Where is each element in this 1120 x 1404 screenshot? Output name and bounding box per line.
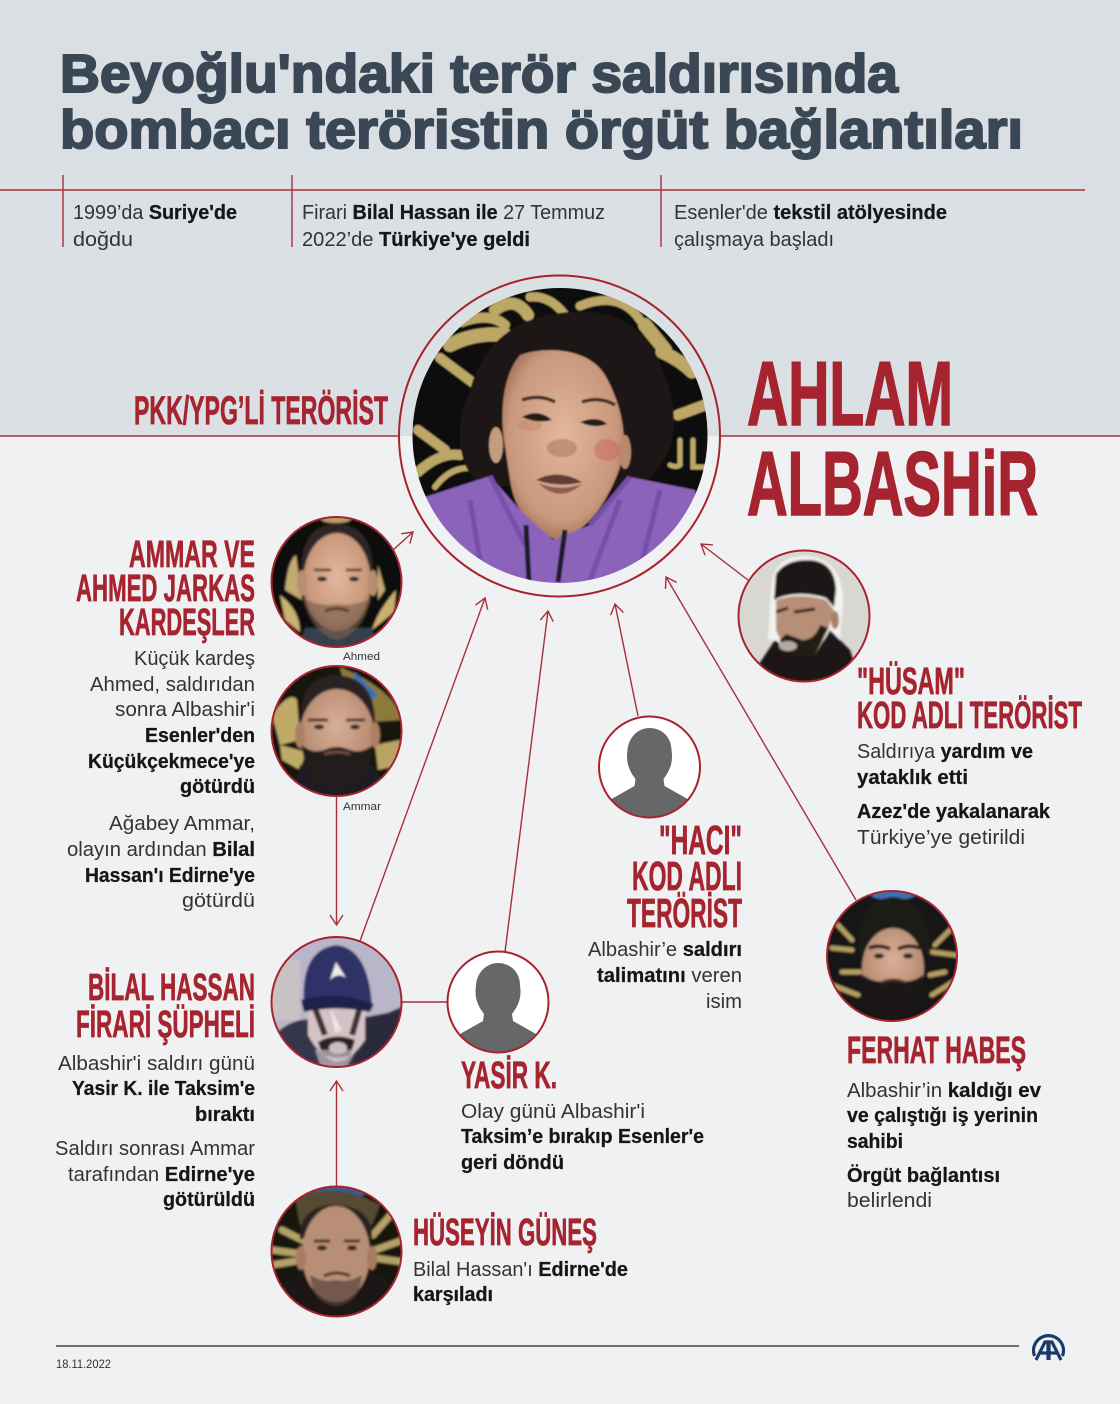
- text: Ahmed: Küçükçekmece'ye: [88, 751, 255, 773]
- heading: "Hüsam" kod adlı terörist: "HÜSAM": [857, 660, 965, 703]
- fact: arrival: Firari Bilal Hassan ile 27 Temmuz: [302, 202, 605, 224]
- text: Ammar: Ağabey Ammar,: [109, 813, 255, 835]
- heading: Bilal Hassan firari şüpheli: BİLAL HASSAN: [88, 967, 255, 1009]
- fact: birth: [73, 202, 237, 251]
- arrow: Ahmed to Albashir: [393, 532, 413, 550]
- heading: Ammar ve Ahmed Jarkas kardeşler: AMMAR VE: [129, 534, 255, 576]
- arrow: Bilal Hassan to Albashir: [360, 598, 485, 941]
- caption: Ammar: Ammar: [343, 801, 381, 813]
- arrow: Ferhat Habeş to Albashir: [666, 577, 856, 900]
- text: Hacı details: Albashir’e saldırı: [588, 939, 742, 961]
- text: Hüsam details: yataklık etti: [857, 767, 968, 789]
- label: PKK/YPG'li terörist: PKK/YPG’Lİ TERÖRİST: [134, 388, 388, 433]
- text: Ahmed: sonra Albashir'i: [115, 699, 255, 721]
- heading: "Hacı" kod adlı terörist: [627, 817, 742, 936]
- text: Bilal Hassan details: tarafından Edirne'ye: [68, 1164, 255, 1186]
- icon: AA logo: [1034, 1336, 1063, 1360]
- date: 18.11.2022: [56, 1357, 111, 1371]
- text: Bilal Hassan details: bıraktı: [195, 1104, 255, 1126]
- text: Bilal Hassan details: Yasir K. ile Taksim'e: [72, 1078, 255, 1100]
- heading: "Hacı" kod adlı terörist: TERÖRİST: [627, 890, 742, 936]
- panel: Hacı: [588, 817, 742, 1013]
- fact: birth: doğdu: [73, 229, 133, 251]
- text: Yasir K. details: Taksim’e bırakıp Esenler'e: [461, 1126, 704, 1148]
- fact: arrival: 2022’de Türkiye'ye geldi: [302, 229, 530, 251]
- text: Hüsam details: Türkiye’ye getirildi: [857, 827, 1025, 849]
- heading: Bilal Hassan firari şüpheli: FİRARİ ŞÜPHELİ: [76, 1003, 255, 1046]
- fact: workshop: Esenler'de tekstil atölyesinde: [674, 202, 947, 224]
- portrait: Bilal Hassan: [270, 935, 405, 1070]
- text: Ahmed: götürdü: [180, 776, 255, 798]
- heading: "Hacı" kod adlı terörist: "HACI": [659, 817, 742, 863]
- text: Bilal Hassan details: götürüldü: [163, 1189, 255, 1211]
- heading: "Hacı" kod adlı terörist: KOD ADLI: [632, 853, 742, 899]
- main name: AHLAM: [747, 344, 953, 445]
- panel: Bilal Hassan: [55, 967, 255, 1211]
- text: Yasir K. details: geri döndü: [461, 1152, 564, 1174]
- heading: Ammar ve Ahmed Jarkas kardeşler: [76, 534, 255, 644]
- heading: "Hüsam" kod adlı terörist: [857, 660, 1082, 737]
- text: Hacı details: isim: [706, 991, 742, 1013]
- portrait: Hacı silhouette: [599, 716, 700, 825]
- text: Ferhat Habeş details: Albashir’in kaldığı ev: [847, 1080, 1042, 1102]
- text: Hüseyin Güneş details: [413, 1259, 628, 1306]
- text: Ammar: Hassan'ı Edirne'ye: [85, 865, 255, 887]
- caption: Ahmed: Ahmed: [343, 651, 380, 663]
- text: Ahmed: [88, 648, 255, 798]
- title: [60, 44, 1023, 160]
- arrow: Hüsam to Albashir: [701, 544, 748, 580]
- panel: Hüseyin Güneş: [413, 1211, 628, 1306]
- text: Ahmed: Esenler'den: [145, 725, 255, 747]
- text: Hüsam details: Azez'de yakalanarak: [857, 801, 1051, 823]
- text: Hüseyin Güneş details: Bilal Hassan'ı Edirne'de: [413, 1259, 628, 1281]
- text: Bilal Hassan details: Albashir'i saldırı günü: [58, 1053, 255, 1075]
- portrait: Ahmed: [270, 515, 404, 650]
- panel: Ammar ve Ahmed Jarkas: [67, 534, 255, 912]
- arrow: Hacı to Albashir: [615, 604, 638, 716]
- arrow: Hüseyin Güneş to Bilal Hassan: [336, 1081, 338, 1186]
- text: Bilal Hassan details: Saldırı sonrası Ammar: [55, 1138, 255, 1160]
- fact: workshop: çalışmaya başladı: [674, 229, 834, 251]
- text: Ferhat Habeş details: Örgüt bağlantısı: [847, 1164, 1000, 1187]
- text: Bilal Hassan details: [55, 1053, 255, 1211]
- text: Hacı details: [588, 939, 742, 1013]
- heading: Hüseyin Güneş: HÜSEYİN GÜNEŞ: [413, 1211, 597, 1254]
- connector: Bilal Hassan to Yasir K.: [402, 1001, 447, 1003]
- portrait: Ammar: [270, 664, 404, 800]
- text: Ammar: [67, 813, 255, 912]
- panel: Ferhat Habeş: [847, 1030, 1042, 1212]
- portrait: Hüsam: [738, 550, 870, 685]
- heading: Ammar ve Ahmed Jarkas kardeşler: AHMED JARKAS: [76, 568, 255, 610]
- arrow: Yasir K. to Albashir: [505, 611, 548, 952]
- portrait: Hüseyin Güneş: [270, 1184, 404, 1320]
- heading: Bilal Hassan firari şüpheli: [76, 967, 255, 1046]
- text: Yasir K. details: [461, 1101, 704, 1174]
- heading: Ammar ve Ahmed Jarkas kardeşler: KARDEŞLER: [119, 602, 255, 644]
- text: Ferhat Habeş details: sahibi: [847, 1131, 903, 1153]
- arrow: Ammar to Bilal Hassan: [336, 796, 338, 925]
- text: Hüsam details: Saldırıya yardım ve: [857, 741, 1033, 763]
- title: bombacı teröristin örgüt bağlantıları: [60, 100, 1023, 160]
- portrait: Yasir K. silhouette: [448, 952, 548, 1060]
- main portrait: [399, 276, 720, 600]
- portrait: Ferhat Habeş: [825, 889, 959, 1025]
- text: Ferhat Habeş details: [847, 1080, 1042, 1212]
- text: Ammar: götürdü: [182, 890, 255, 912]
- panel: Yasir K.: [461, 1055, 704, 1174]
- heading: Yasir K.: YASİR K.: [461, 1055, 557, 1097]
- panel: Hüsam: [857, 660, 1082, 849]
- text: Ammar: olayın ardından Bilal: [67, 839, 255, 861]
- text: Hüseyin Güneş details: karşıladı: [413, 1284, 493, 1306]
- text: Hacı details: talimatını veren: [597, 965, 742, 987]
- title: Beyoğlu'ndaki terör saldırısında: [60, 44, 899, 104]
- text: Ahmed: Ahmed, saldırıdan: [90, 674, 255, 696]
- text: Ferhat Habeş details: belirlendi: [847, 1190, 932, 1212]
- main name: [747, 344, 1038, 535]
- fact: birth: 1999’da Suriye'de: [73, 202, 237, 224]
- text: Yasir K. details: Olay günü Albashir'i: [461, 1101, 645, 1123]
- text: Ahmed: Küçük kardeş: [134, 648, 255, 670]
- text: Hüsam details: [857, 741, 1051, 849]
- fact: workshop: [674, 202, 947, 251]
- fact: arrival: [302, 202, 605, 251]
- text: Ferhat Habeş details: ve çalıştığı iş yerinin: [847, 1105, 1038, 1127]
